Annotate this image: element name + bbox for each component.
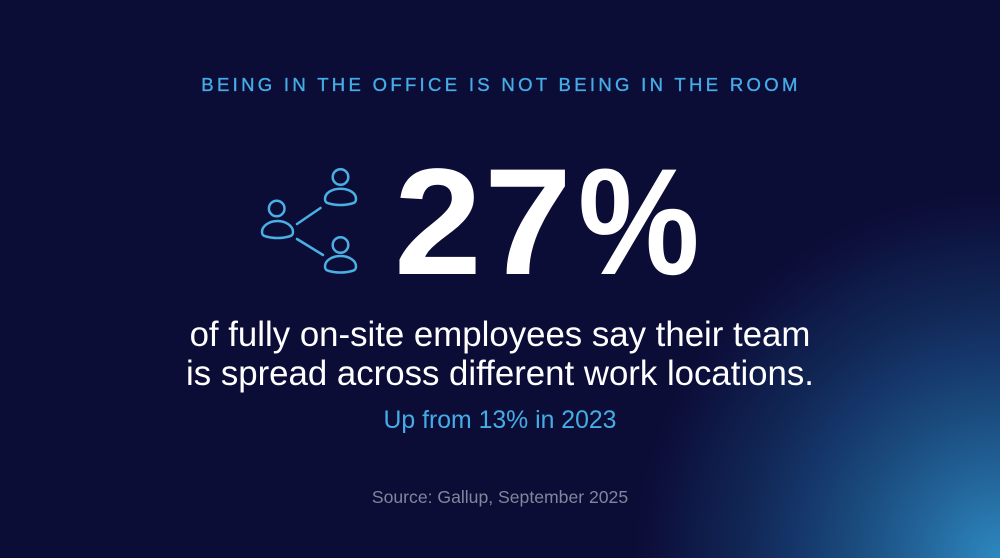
big statistic: 2	[394, 138, 482, 307]
comparison note: Up from 13% in 2023	[384, 407, 616, 434]
big statistic: 7	[484, 138, 572, 307]
heading: BEING IN THE OFFICE IS NOT BEING IN THE ROOM	[201, 74, 801, 95]
icon: connected people network	[260, 168, 358, 274]
description text	[186, 315, 814, 393]
description text: is spread across different work locations.	[186, 354, 814, 393]
big statistic	[394, 138, 700, 307]
source: Source: Gallup, September 2025	[372, 487, 628, 507]
big statistic: %	[578, 138, 700, 307]
description text: of fully on-site employees say their team	[190, 315, 810, 354]
